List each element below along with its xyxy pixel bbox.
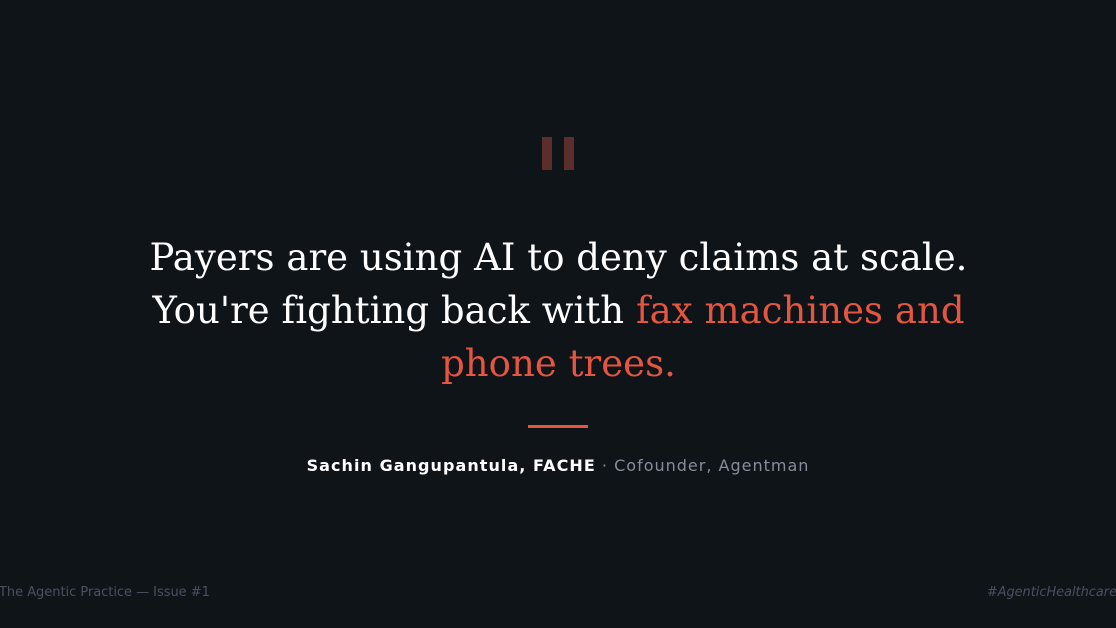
quote text: Payers are using AI to deny claims at scale. (150, 236, 967, 279)
footer: hashtag: #AgenticHealthcare (987, 585, 1116, 600)
icon: quotation mark (542, 137, 574, 170)
quote text (150, 236, 967, 385)
divider accent (528, 425, 588, 428)
quote text: phone trees. (441, 342, 676, 385)
attribution: Sachin Gangupantula, FACHE · Cofounder, Agentman (307, 456, 809, 475)
quote text: You're fighting back with fax machines and (152, 289, 965, 332)
footer: issue label: The Agentic Practice — Issue #1 (0, 585, 210, 600)
